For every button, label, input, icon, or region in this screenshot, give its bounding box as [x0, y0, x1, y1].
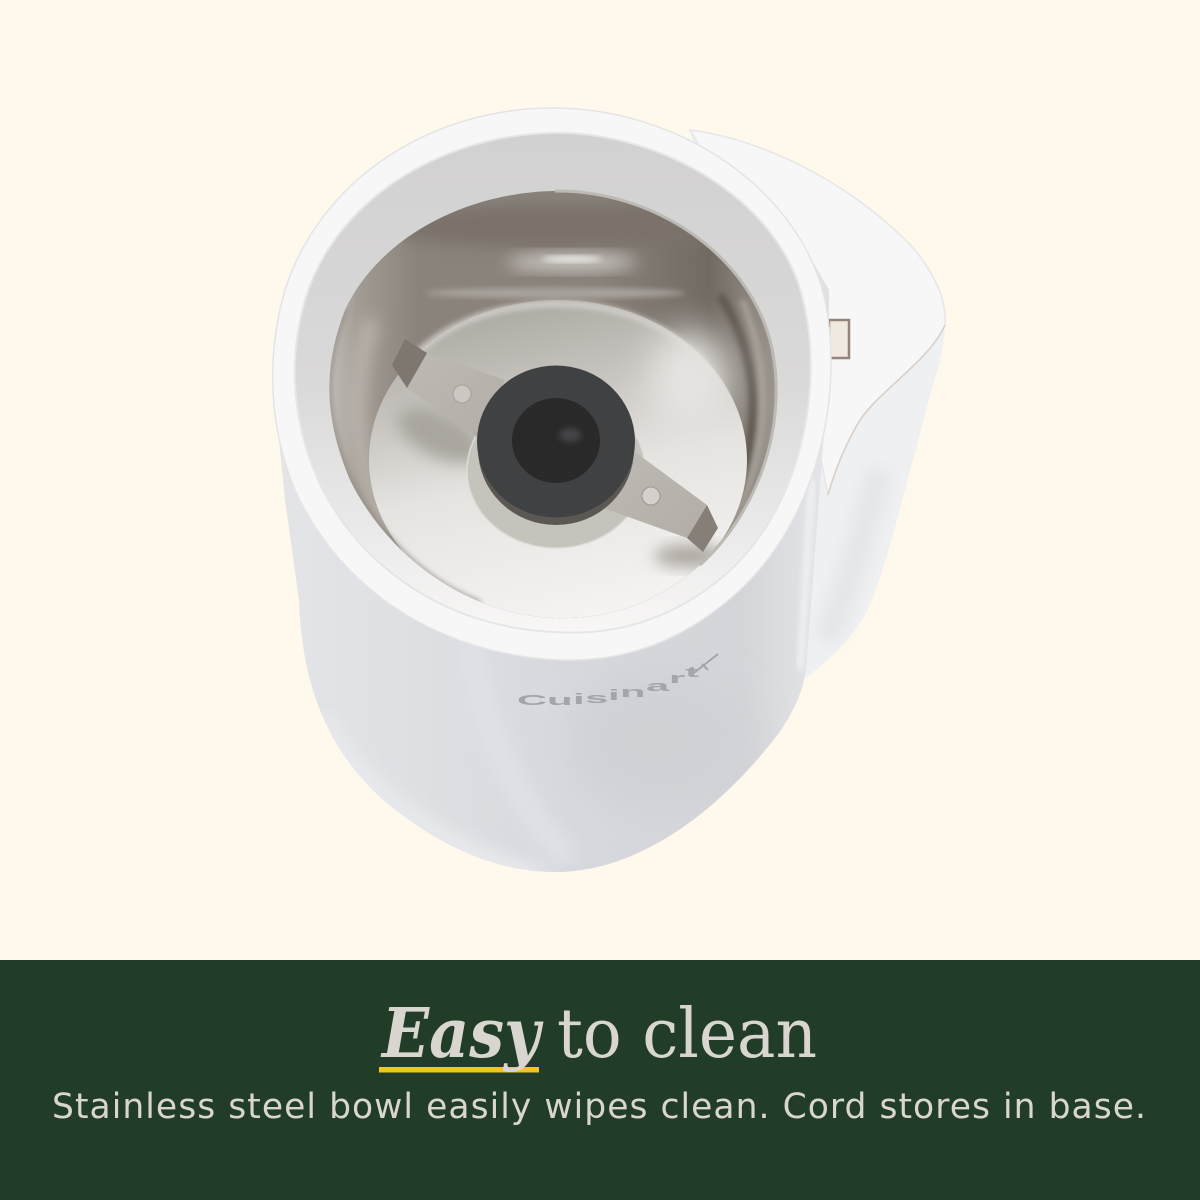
heading: Easy: [380, 994, 544, 1074]
heading: to clean: [557, 995, 817, 1074]
blade: [392, 339, 718, 552]
heading: [380, 994, 817, 1074]
grinder body: [277, 420, 825, 880]
brand logo: Cuisinart: [517, 664, 700, 708]
product illustration: coffee grinder: [272, 107, 946, 872]
grinder base wing: [690, 130, 945, 678]
caption panel: [0, 960, 1200, 1200]
blade hub: [477, 366, 635, 525]
switch housing: [809, 255, 829, 316]
stainless steel bowl: [329, 191, 776, 620]
switch: [829, 320, 849, 358]
rim: [273, 108, 831, 660]
subheading: Stainless steel bowl easily wipes clean. Cord stores in base.: [52, 1087, 1146, 1127]
yellow underline: [379, 1067, 539, 1072]
blade hub disc: [467, 392, 645, 548]
